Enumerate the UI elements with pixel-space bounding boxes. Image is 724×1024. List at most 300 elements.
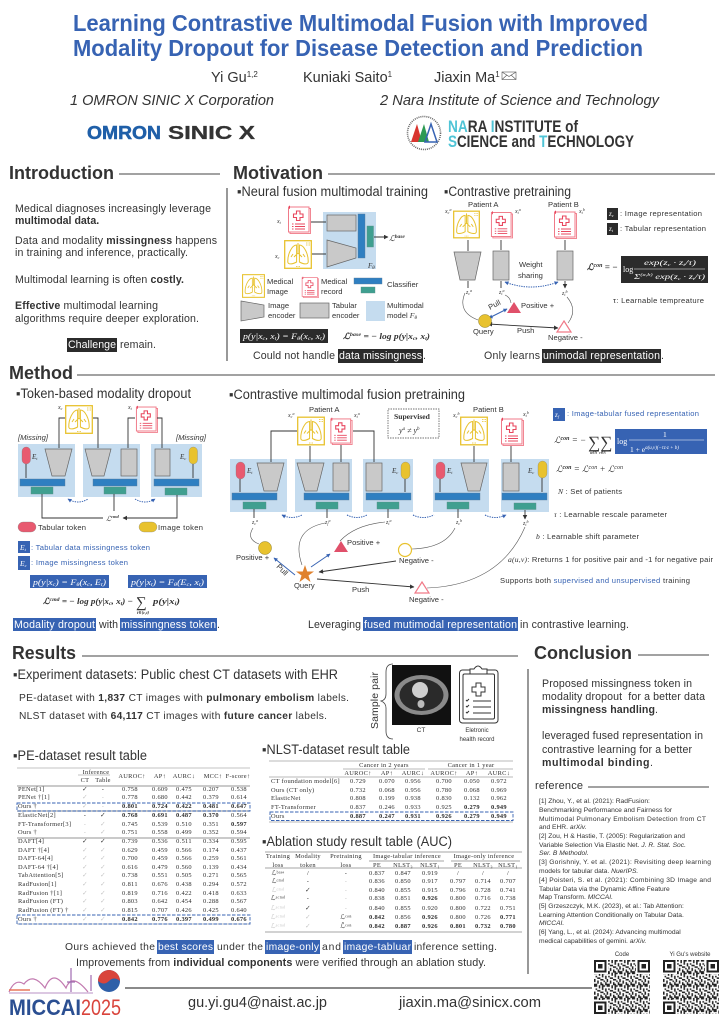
table: ablation study: 0.707 [500,878,516,885]
callout: modality dropout: . [217,619,220,631]
table: PE dataset: 0.479 [152,864,168,871]
table: PE dataset: 0.647 [231,803,247,810]
diagram: token-based modality dropout: c [184,456,186,461]
legend: tokens [18,522,203,532]
formula: modality dropout loss: , x [110,596,121,606]
intro text: Multimodal learning is often costly. [15,274,184,286]
table: ablation study: 0.850 [395,878,411,885]
formula: fused loss: log [617,437,627,446]
formula: fusion model: ) [321,331,325,341]
diagram: neural fusion: θ [372,266,375,271]
diagram: token-based modality dropout: ℒ [106,515,111,523]
formula: modality dropout loss [43,595,180,615]
patient inputs [287,410,529,446]
table: PE dataset: TabAttention[5] [18,872,64,879]
table: ablation study: 0.716 [475,895,491,902]
diagram: neural fusion: x [277,219,280,225]
affiliations: 2 Nara Institute of Science and Technology [379,92,660,109]
references: models for tabular data. NuerIPS. [539,868,638,875]
table: PE dataset: RadFusion (FT) [18,898,63,905]
table: PE dataset: 0.510 [176,821,192,828]
table: NLST dataset: 0.969 [491,787,507,794]
table: NLST dataset: Ours [271,813,285,820]
table: NLST dataset: 0.931 [405,813,421,820]
formula: modality dropout loss: i [174,601,177,607]
legend: fused representation: z [555,411,558,419]
legend: representations: : Image representation [620,209,702,218]
table: PE dataset: ✓ [100,872,106,879]
formula: contrastive loss: ℒ [587,262,593,272]
table: NLST dataset: 0.972 [491,778,507,785]
table: PE dataset: 0.597 [231,821,247,828]
table: NLST dataset: 0.700 [436,778,452,785]
table: PE dataset: ✓ [82,855,88,862]
table: PE dataset: 0.716 [152,890,168,897]
formula: fused loss: a(u,v)(−τz·z + b) [645,446,679,451]
QR code: code: Code [615,952,630,958]
table: PE dataset: ✓ [100,916,106,923]
formula: total loss: ℒ [556,464,562,474]
subheading: NLST table: ▪NLST-dataset result table [262,742,410,757]
latent labels: c [458,521,460,526]
table: NLST dataset: 0.949 [491,813,507,820]
table: ablation study: loss [272,862,284,869]
references: MICCAI. [539,920,564,927]
supervised box: ≠ y [405,426,417,435]
formulas: missing modality: c [53,582,56,588]
parameter notes: b : Learnable shift parameter [536,532,639,541]
formula: base loss: = − log p(y|x [361,331,414,341]
callout: could not handle: . [423,350,426,362]
patient labels: Patient B [473,405,504,414]
table: PE dataset: 0.707 [152,907,168,914]
table: ablation study: Modality [295,853,321,860]
table: PE dataset: 0.334 [203,838,219,845]
formula: contrastive loss: Σ [634,272,638,281]
references: Ser. B Methodol. [539,850,589,857]
table: ablation study: 0.801 [450,923,466,930]
diagram: contrastive pretraining: Pull [487,298,502,312]
callout: only learns: . [661,350,664,362]
table: ablation study: 0.771 [500,914,516,921]
formula: contrastive loss: exp(z [644,258,660,267]
table: NLST dataset: 0.808 [350,795,366,802]
callout: only learns: Only learns [484,350,540,362]
table: PE dataset: 0.567 [231,898,247,905]
diagram: contrastive pretraining: t [518,210,520,215]
formulas: missing modality: , E [90,577,102,587]
table: PE dataset: 0.426 [176,907,192,914]
legend: missingness tokens: c [25,563,27,568]
fusion panels: E [447,467,451,475]
table: ablation study: 0.926 [422,895,438,902]
callout: only learns [484,349,664,363]
table: ablation study: 0.800 [450,914,466,921]
diagram: contrastive pretraining: c [468,291,470,296]
table: ablation study: 0.796 [450,887,466,894]
summary: results: best scores [158,942,213,953]
references: Benchmarking Performance and Fairness for [539,807,673,814]
table: PE dataset: 0.616 [122,864,138,871]
formulas: missing modality: θ [174,582,177,588]
legend: neural fusion: encoder [268,311,296,320]
table: ablation study: 0.728 [475,887,491,894]
callout: modality dropout: Modality dropout [14,619,95,631]
table: PE dataset: ✓ [82,794,88,801]
table: NLST dataset: Ours (CT only) [271,787,314,794]
heading: Conclusion: Conclusion [534,642,632,663]
dataset descriptions: PE-dataset with 1,837 CT images with pulmonary embolism labels. [19,693,349,704]
table: PE dataset: 0.481 [203,803,219,810]
formulas: missing modality: (E [177,577,187,587]
diagram: contrastive pretraining: b [565,289,567,294]
table: PE dataset: 0.561 [231,855,247,862]
diagram: contrastive pretraining: Query [473,327,494,336]
table: NLST dataset: 0.199 [379,795,395,802]
fusion panels [230,459,549,512]
QR code: website [663,952,719,1014]
diagram: contrastive pretraining: Positive + [521,301,555,310]
formula: contrastive loss: con [593,263,603,269]
intro text: multimodal data. [15,215,99,227]
table: PE dataset: ✓ [100,847,106,854]
references: Multimodal Pulmonary Embolism Detection from CT [539,816,706,823]
table: NLST dataset: AURC↓ [402,770,424,777]
diagram: neural fusion: F [368,262,372,270]
table: NLST dataset: 0.068 [379,787,395,794]
table: ablation study: 0.842 [369,923,385,930]
table: NLST dataset: 0.938 [405,795,421,802]
table: ablation study: token [300,862,316,869]
formula: contrastive loss: t [693,276,696,281]
legend: missingness tokens: E [20,559,25,568]
intro text: algorithms require deeper exploration. [15,313,199,325]
formula: fused loss: u∈N v∈N [590,451,606,455]
connectors [240,431,542,519]
table: PE dataset: ✓ [100,821,106,828]
formula: fused loss: 1 [663,430,667,439]
formula: total loss: con [562,465,572,471]
callout: only learns: unimodal representation [543,350,660,362]
table: ablation study: NLST₁ [498,862,518,869]
authors: 1,2 [247,70,258,79]
diagram: token-based modality dropout: cmd [111,514,120,519]
subheading: ablation table: ▪Ablation study result table (AUC) [262,834,452,849]
parameter notes: N : Set of patients [557,487,622,496]
table: PE dataset: 0.676 [231,916,247,923]
table: NLST dataset: Cancer in 1 year [448,762,495,769]
table: PE dataset: ✓ [100,890,106,897]
formula: modality dropout loss: i∈{c,t} [137,610,150,615]
table: NLST dataset: 0.050 [464,778,480,785]
diagram: token-based modality dropout: c [61,406,63,411]
authors: 1 [388,70,393,79]
latent labels: z [456,520,458,526]
table: ablation study: NLST₁ [420,862,440,869]
contact emails: gu.yi.gu4@naist.ac.jp [188,995,327,1011]
latent labels: a [328,518,330,523]
diagram: token-based modality dropout: x [58,405,61,411]
references: [3] Gorishniy, Y. et al. (2021): Revisiting deep learning [539,859,711,866]
diagram: contrastive pretraining: c [448,210,450,215]
table: PE dataset: ✓ [82,898,88,905]
formula: modality dropout loss: p(y|x [153,596,170,606]
table: PE dataset: 0.438 [176,881,192,888]
formula: contrastive loss: · z [681,272,693,281]
formula: fused loss: 1 + e [630,445,645,454]
table: NLST dataset: CT foundation model[6] [271,778,340,785]
formulas: missing modality: t [199,582,201,588]
diagram: neural fusion [274,206,405,271]
authors: Kuniaki Saito [303,70,388,86]
QR code: code [594,952,650,1014]
table: PE dataset: ElasticNet[2] [18,812,56,819]
table: PE dataset: 0.566 [176,847,192,854]
table: PE dataset: 0.511 [176,838,192,845]
table: ablation study: 0.726 [475,914,491,921]
legend: neural fusion: encoder [332,311,360,320]
latent labels: b [460,518,462,523]
patient inputs: x [453,413,456,419]
formula: contrastive loss: (a,b) [640,272,653,278]
formula: base loss: c [413,336,416,342]
formula: total loss: = ℒ [571,464,589,474]
formula: total loss: + ℒ [597,464,615,474]
diagram: contrastive pretraining: Weight [519,260,543,269]
table: NLST dataset: 0.780 [436,787,452,794]
table: NLST dataset: AP↑ [381,770,393,777]
patient inputs: x [354,413,357,419]
table: PE dataset: 0.422 [176,803,192,810]
formula: fused loss: ℒ [554,435,560,445]
table: ablation study: 0.741 [500,887,516,894]
shared weight arcs [282,515,506,518]
logo: OMRON SINIC X: SINIC X [168,123,255,143]
table: ablation study: ℒᵇᵃˢᵉ [272,870,284,877]
latent labels: a [256,518,258,523]
latent labels: z [252,520,254,526]
sample pair [369,664,498,743]
table: PE dataset: ✓ [100,864,106,871]
formulas: missing modality: p(y|x [33,577,50,587]
references: Variable Selection Via Elastic Net. J. R. Stat. Soc. [539,842,686,849]
logo: MICCAI 2025: MICCAI [9,995,81,1020]
contact emails: jiaxin.ma@sinicx.com [398,995,541,1011]
table: PE dataset: 0.819 [122,890,138,897]
formula: contrastive loss: = − [602,262,618,272]
references: Learning Attention Conditionally on Tabular Data. [539,912,684,919]
latent labels [251,518,528,527]
conclusion text: Proposed missingness token in [542,678,692,690]
diagram: contrastive pretraining: z [499,290,501,296]
dataset descriptions: NLST dataset with 64,117 CT images with future cancer labels. [19,711,327,722]
legend: neural fusion: model F [387,311,414,320]
table: ablation study: ✓ [305,923,311,930]
table: PE dataset: 0.842 [122,916,138,923]
diagram: contrastive pretraining: Patient B [548,200,579,209]
panel: motivation [227,162,715,363]
parameter notes: Supports both supervised and unsupervised training [500,576,690,585]
formula: base loss: , x [415,331,426,341]
table: PE dataset: 0.539 [152,821,168,828]
table: NLST dataset: 0.956 [405,787,421,794]
formula: base loss: ℒ [343,331,349,341]
supervised box: y [399,426,403,435]
legend: fused representation: : Image-tabular fused representation [567,409,699,418]
formula: base loss: ) [426,331,430,341]
callout: could not handle [253,349,426,363]
fusion panels: t [451,470,453,475]
table rules [269,761,513,822]
table: PE dataset: 0.738 [122,872,138,879]
table: PE dataset: 0.437 [231,847,247,854]
patient inputs: t [526,413,528,418]
table: NLST dataset: 0.279 [464,804,480,811]
table: NLST dataset: 0.962 [491,795,507,802]
formulas: missing modality: c [87,582,91,588]
table: ablation study: 0.732 [475,923,491,930]
formulas: missing modality: ) = F [152,577,175,587]
table: ablation study: - [345,895,347,902]
diagram: contrastive pretraining: Push [517,326,534,335]
table: PE dataset: ✓ [100,881,106,888]
table rules [17,768,250,924]
summary: results: image-tabluar [344,942,412,953]
table: PE dataset: 0.475 [176,786,192,793]
logo: Nara Institute: SCIENCE and TECHNOLOGY [448,132,635,151]
contrast anchors: Query [294,581,315,590]
contrast anchors: Push [352,585,369,594]
formulas: missing modality [30,575,207,588]
formulas: missing modality: , x [189,577,199,587]
table: ablation study: 0.926 [422,914,438,921]
table: NLST dataset: AURC↓ [488,770,510,777]
table rules [265,852,522,932]
table: ablation study: 0.917 [422,878,438,885]
callout: leveraging fused representation: in contrastive learning. [520,619,629,631]
legend: fused representation: f [558,414,560,419]
supervised box: a [403,427,406,432]
table: PE dataset: Ours † [18,803,37,810]
table: ablation study: 0.722 [475,905,491,912]
legend: representations: z [609,225,612,233]
parameter notes: τ : Learnable rescale parameter [554,510,667,519]
diagram: neural fusion: ℒ [389,234,395,243]
formulas: missing modality: c [187,582,190,588]
table: PE dataset: 0.536 [152,838,168,845]
table: PE dataset: RadFusion †[1] [18,890,62,897]
table: PE dataset: 0.139 [203,864,219,871]
table: PE dataset: ✓ [82,890,88,897]
subheading: neural fusion: ▪Neural fusion multimodal training [237,184,428,199]
patient inputs: a [358,411,360,416]
latent labels: b [526,519,528,524]
table: PE dataset: F-score↑ [226,773,250,780]
callout: leveraging fused representation: Leveraging [308,619,361,631]
table: ablation study: ℒᵃᶜᵐᵈ [271,923,285,930]
footer [9,952,719,1020]
table: PE dataset: 0.288 [203,898,219,905]
contrast anchors: Negative - [399,556,434,565]
table: PE dataset: 0.454 [176,898,192,905]
table: ablation study: ℒᶜᵐᵈ [272,887,284,894]
table: PE dataset: AUROC↑ [118,773,146,780]
patient inputs: b [457,411,459,416]
formula: fusion model: , x [311,331,320,341]
table: PE dataset: ✓ [82,838,88,845]
legend: fused representation [553,408,699,421]
table: ablation study: / [457,870,459,877]
table: NLST dataset: 0.933 [405,804,421,811]
formula: modality dropout loss: t [121,601,123,607]
formula: modality dropout loss: cmd [50,597,60,603]
table: PE dataset: ✓ [100,838,106,845]
conclusion text: missingness handling. [542,704,658,716]
legend: missingness tokens: E [20,543,25,552]
table: PE dataset: 0.207 [203,786,219,793]
table: NLST dataset: 0.837 [350,804,366,811]
diagram: contrastive pretraining: x [445,209,448,215]
title [73,10,648,61]
table: ablation study: 0.780 [500,923,516,930]
formulas: missing modality: p(y|x [131,577,148,587]
formula: fusion model: θ [297,336,301,342]
legend: neural fusion: Tabular [332,301,357,310]
table: PE dataset: FT-Transformer[3] [18,821,71,828]
table: ablation study: 0.714 [475,878,491,885]
summary: results: and [322,942,341,953]
affiliations [70,92,660,109]
sample pair: Eletronic [465,728,489,734]
logo: MICCAI 2025 [9,968,121,1020]
fusion panels: c [396,470,398,475]
table: ablation study: Pretraining [330,853,362,860]
references: [6] Yang, L., et al. (2024): Advancing multimodal [539,929,681,936]
sample pair: Sample pair [369,672,381,729]
references: [5] Grzeszczyk, M.K. (2023), et al.: Tab Attention: [539,903,684,910]
highlight: best row [270,812,513,820]
table: PE dataset: ✓ [82,786,88,793]
diagram: contrastive pretraining: a [519,207,521,212]
table: PE dataset: AP↑ [154,773,166,780]
table: ablation study: 0.838 [369,895,385,902]
subheading: contrastive fusion: ▪Contrastive multimodal fusion pretraining [229,387,465,402]
contrast arrows [274,554,414,587]
formula: modality dropout loss: ℒ [43,596,49,606]
table: ablation study: ℒᶜᵐᵈ [272,878,284,885]
legend: neural fusion: Image [267,287,288,296]
table: PE dataset: Ours † [18,829,37,836]
formula: modality dropout loss: ∑ [136,595,147,611]
formula: contrastive loss [587,256,708,283]
formula: fused loss [554,429,707,455]
table: PE dataset: 0.422 [176,890,192,897]
summary: results: Ours achieved the [65,942,155,953]
table: PE dataset: - [102,803,104,810]
table: PE dataset: 0.442 [176,794,192,801]
table: PE dataset: ✓ [100,829,106,836]
table: ablation study: - [345,878,347,885]
diagram: contrastive pretraining: a [470,288,472,293]
legend: neural fusion: θ [414,316,417,321]
table: PE dataset: 0.691 [152,812,168,819]
formula: modality dropout loss: = − log p(y|x [60,596,110,606]
formula: contrastive loss: exp(z [653,272,678,281]
table: PE dataset: 0.566 [176,855,192,862]
patient inputs: b [527,410,529,415]
supervised box: Supervised [394,412,431,421]
patient inputs: c [291,414,293,419]
